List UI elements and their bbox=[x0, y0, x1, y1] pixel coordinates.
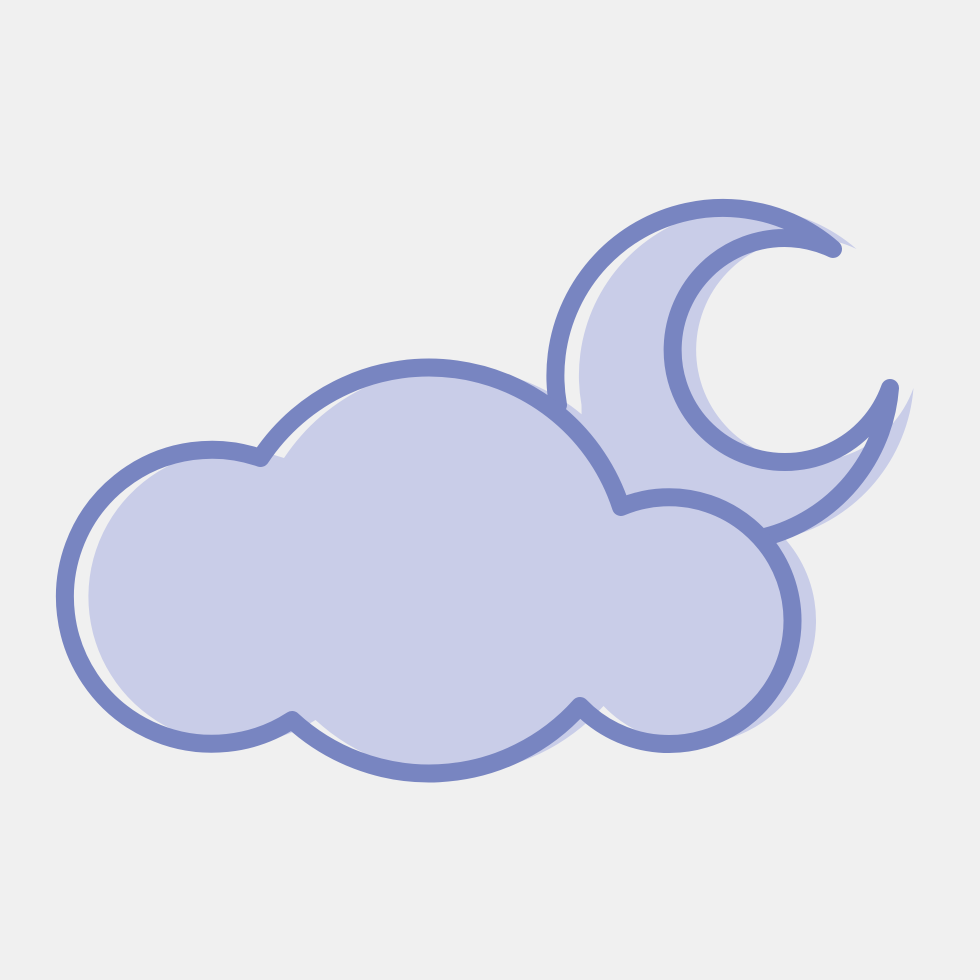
cloud fill bbox=[88, 368, 816, 773]
offset fill shapes bbox=[88, 208, 913, 773]
cloud outline bbox=[65, 368, 793, 773]
moon fill bbox=[579, 208, 914, 600]
moon outline bbox=[555, 208, 890, 537]
